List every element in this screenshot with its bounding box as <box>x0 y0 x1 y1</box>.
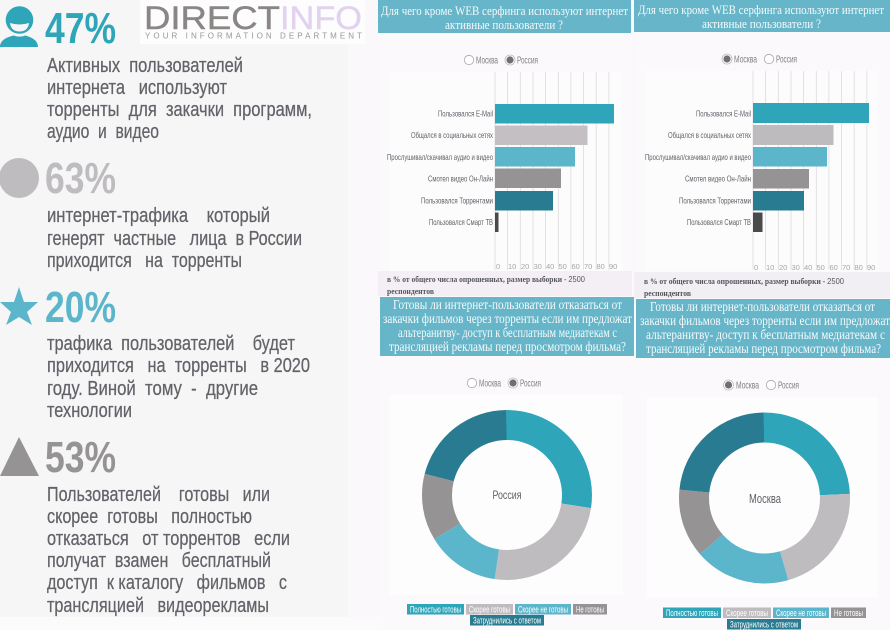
bar chart: 90 <box>867 263 875 272</box>
heading: torrent refusal question, Russia <box>380 297 634 356</box>
stat block: 20% <box>0 283 310 422</box>
stat description 53%: скорее готовы полностью <box>47 506 252 528</box>
bar chart: Смотел видео Он-Лайн <box>428 174 493 184</box>
heading: torrent refusal question, Russia: трансляцией рекламы перед просмотром фильма? <box>389 339 626 354</box>
bar chart: Смотел видео Он-Лайн <box>685 174 751 184</box>
bar chart: 40 <box>804 263 812 272</box>
heading: web usage question, Russia: активные пользователи ? <box>445 18 563 32</box>
legend: Не готовы <box>576 604 604 616</box>
stat description 63% <box>47 205 302 272</box>
bar chart: Пользовался E-Mail <box>696 108 751 118</box>
stat description 53%: получат взамен бесплатный <box>47 550 271 572</box>
stat block: 53% <box>0 433 290 617</box>
panel: bar chart Moscow <box>634 0 890 298</box>
icon: user <box>0 6 38 47</box>
stat description 47%: интернета используют <box>47 77 227 99</box>
stat description 47%: торренты для закачки программ, <box>47 99 312 121</box>
bar chart: 70 <box>842 263 850 272</box>
bar chart: 0 <box>496 262 500 271</box>
radio selector <box>722 54 797 66</box>
bar chart: 50 <box>816 263 825 272</box>
bar chart: 40 <box>546 262 554 271</box>
panel: donut chart Russia <box>378 297 634 630</box>
radio selector: Москва <box>479 378 501 390</box>
bar chart: 70 <box>584 262 592 271</box>
legend: Скорее не готовы <box>776 608 826 619</box>
bar chart: Пользовался Смарт ТВ <box>687 217 751 227</box>
legend: Не готовы <box>834 608 863 619</box>
stat description 63%: генерят частные лица в России <box>47 228 302 250</box>
bar chart: 10 <box>508 262 516 271</box>
stat number 20%: 20% <box>45 283 116 332</box>
stat description 53%: доступ к каталогу фильмов с <box>47 572 287 594</box>
bar chart: 30 <box>792 263 800 272</box>
panel: bar chart Russia <box>378 0 632 296</box>
radio selector: Россия <box>520 378 541 390</box>
icon: circle <box>0 158 39 198</box>
radio selector: Москва <box>736 380 759 392</box>
bar chart: Пользовался Торрентами <box>421 196 493 206</box>
legend: Скорее готовы <box>469 604 510 616</box>
icon: triangle <box>0 437 39 476</box>
bar chart: Пользовался Торрентами <box>679 196 751 206</box>
radio selector <box>724 380 799 392</box>
heading: web usage question, Moscow: активные пользователи ? <box>702 17 821 31</box>
radio selector: Москва <box>476 56 498 66</box>
stat description 53%: Пользователей готовы или <box>47 484 270 506</box>
legend <box>407 604 607 626</box>
legend <box>663 608 866 630</box>
bar chart: Пользовался E-Mail <box>438 108 493 118</box>
bar chart: 20 <box>779 263 787 272</box>
bar chart <box>645 71 878 272</box>
logo: DirectInfo <box>140 0 365 44</box>
stat description 53% <box>47 484 290 617</box>
stat description 53%: трансляцией видеорекламы <box>47 595 269 617</box>
stat description 53%: отказаться от торрентов если <box>47 528 290 550</box>
stat description 47%: аудио и видео <box>47 121 159 143</box>
bar chart: 50 <box>558 262 567 271</box>
logo: DirectInfo: DIRECT <box>144 0 280 36</box>
stat description 63%: интернет-трафика который <box>47 205 270 227</box>
stat block: 63% <box>0 154 302 272</box>
donut chart: Россия <box>492 488 522 502</box>
logo: DirectInfo: INFO <box>280 0 362 36</box>
donut chart <box>647 397 878 598</box>
radio selector: Россия <box>776 54 797 66</box>
bar chart: Общался в социальных сетях <box>668 130 752 140</box>
icon: star <box>0 287 38 325</box>
heading: torrent refusal question, Russia: альтеранитву- доступ к бесплатным медиатекам с <box>398 325 617 340</box>
heading: torrent refusal question, Russia: закачки фильмов через торренты если им предложат <box>383 311 632 326</box>
bar chart: 60 <box>572 262 580 271</box>
stat description 47% <box>47 55 312 143</box>
bar chart: 80 <box>596 262 605 271</box>
bar chart: Прослушивал/скачивал аудио и видео <box>645 152 751 162</box>
bar chart: 80 <box>854 263 863 272</box>
heading: web usage question, Russia: Для чего кроме WEB серфинга используют интернет <box>381 4 628 18</box>
stat description 47%: Активных пользователей <box>47 55 243 77</box>
radio selector <box>467 378 541 390</box>
donut chart: Москва <box>749 491 782 506</box>
footnote: в % от общего числа опрошенных, размер выборки - 2500 <box>644 276 844 286</box>
bar chart: 20 <box>521 262 529 271</box>
legend: Скорее не готовы <box>518 604 568 616</box>
stat block: 47% <box>0 4 312 143</box>
stat description 63%: приходится на торренты <box>47 250 242 272</box>
footnote: респондентов <box>644 288 691 298</box>
bar chart: 90 <box>609 262 617 271</box>
bar chart: 30 <box>534 262 542 271</box>
radio selector <box>464 55 538 66</box>
stat description 20%: году. Виной тому - другие <box>47 378 258 400</box>
bar chart <box>387 72 623 271</box>
stat number 47%: 47% <box>45 4 116 53</box>
legend: Скорее готовы <box>726 608 768 619</box>
stat description 20%: технологии <box>47 400 132 422</box>
footnote <box>634 272 890 298</box>
heading: web usage question, Russia <box>378 0 631 33</box>
legend: Затруднились с ответом <box>473 616 541 626</box>
bar chart: Прослушивал/скачивал аудио и видео <box>387 152 493 162</box>
radio selector: Москва <box>734 54 757 66</box>
stat description 20% <box>47 333 310 422</box>
heading: web usage question, Moscow <box>634 0 890 32</box>
bar chart: Пользовался Смарт ТВ <box>429 217 493 227</box>
stat number 53%: 53% <box>45 433 116 482</box>
logo: DirectInfo: YOUR INFORMATION DEPARTMENT <box>145 32 362 40</box>
heading: torrent refusal question, Russia: Готовы ли интернет-пользователи отказаться от <box>393 297 622 312</box>
bar chart: 0 <box>754 263 758 272</box>
legend: Полностью готовы <box>666 608 718 619</box>
footnote: респондентов <box>387 286 434 296</box>
panel: donut chart Moscow <box>636 299 890 630</box>
stat description 20%: приходится на торренты в 2020 <box>47 355 310 377</box>
donut chart <box>390 395 623 595</box>
stat number 63%: 63% <box>45 154 116 203</box>
bar chart: Общался в социальных сетях <box>411 130 494 140</box>
legend: Полностью готовы <box>410 604 461 616</box>
heading: torrent refusal question, Moscow <box>636 299 890 358</box>
bar chart: 10 <box>766 263 774 272</box>
radio selector: Россия <box>778 380 799 392</box>
footnote <box>378 271 632 296</box>
bar chart: 60 <box>830 263 838 272</box>
stat description 20%: трафика пользователей будет <box>47 333 295 355</box>
radio selector: Россия <box>517 56 538 66</box>
footnote: в % от общего числа опрошенных, размер выборки - 2500 <box>387 274 585 284</box>
